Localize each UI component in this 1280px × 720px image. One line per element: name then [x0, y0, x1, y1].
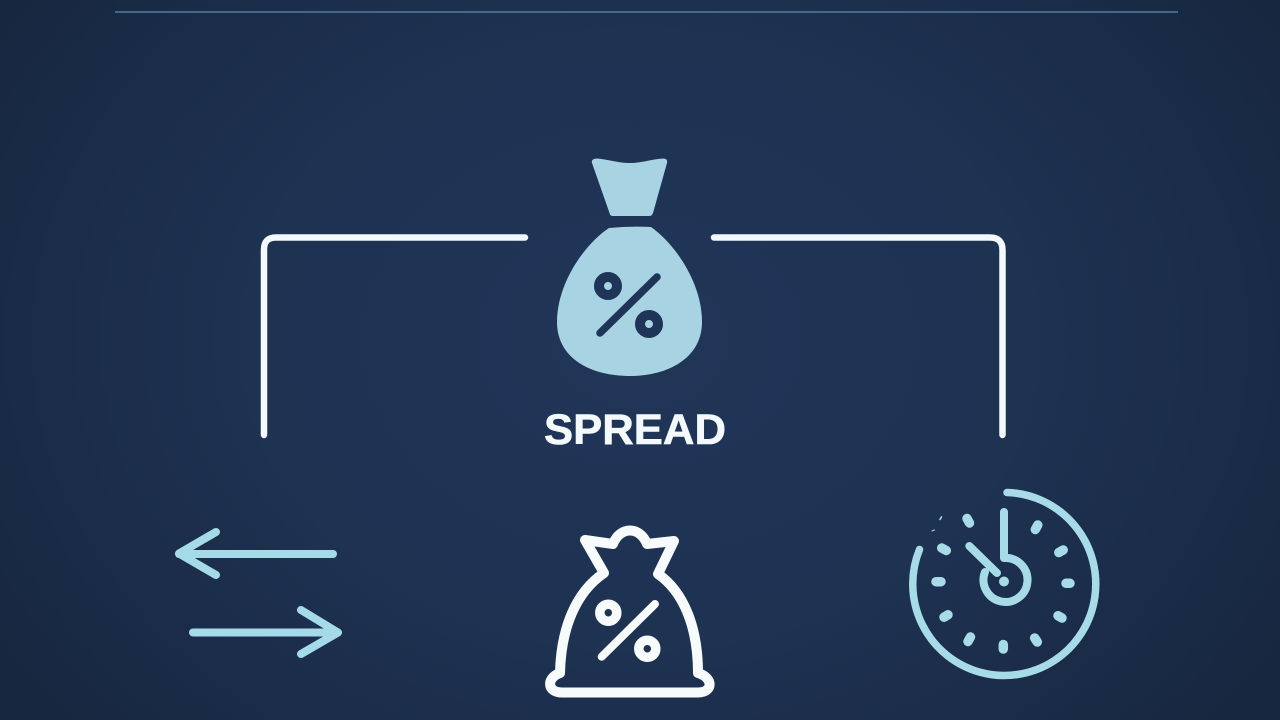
connector: right bracket: [714, 238, 1002, 435]
connector: left bracket: [264, 238, 525, 435]
icon: opposing arrows: [179, 532, 338, 654]
icon: stopwatch dial: [913, 492, 1096, 675]
icon: filled money bag with percent: [557, 158, 702, 376]
label: SPREAD: SPREAD: [544, 406, 726, 454]
icon: outlined money bag with percent: [550, 530, 710, 692]
top divider line: [115, 11, 1178, 13]
